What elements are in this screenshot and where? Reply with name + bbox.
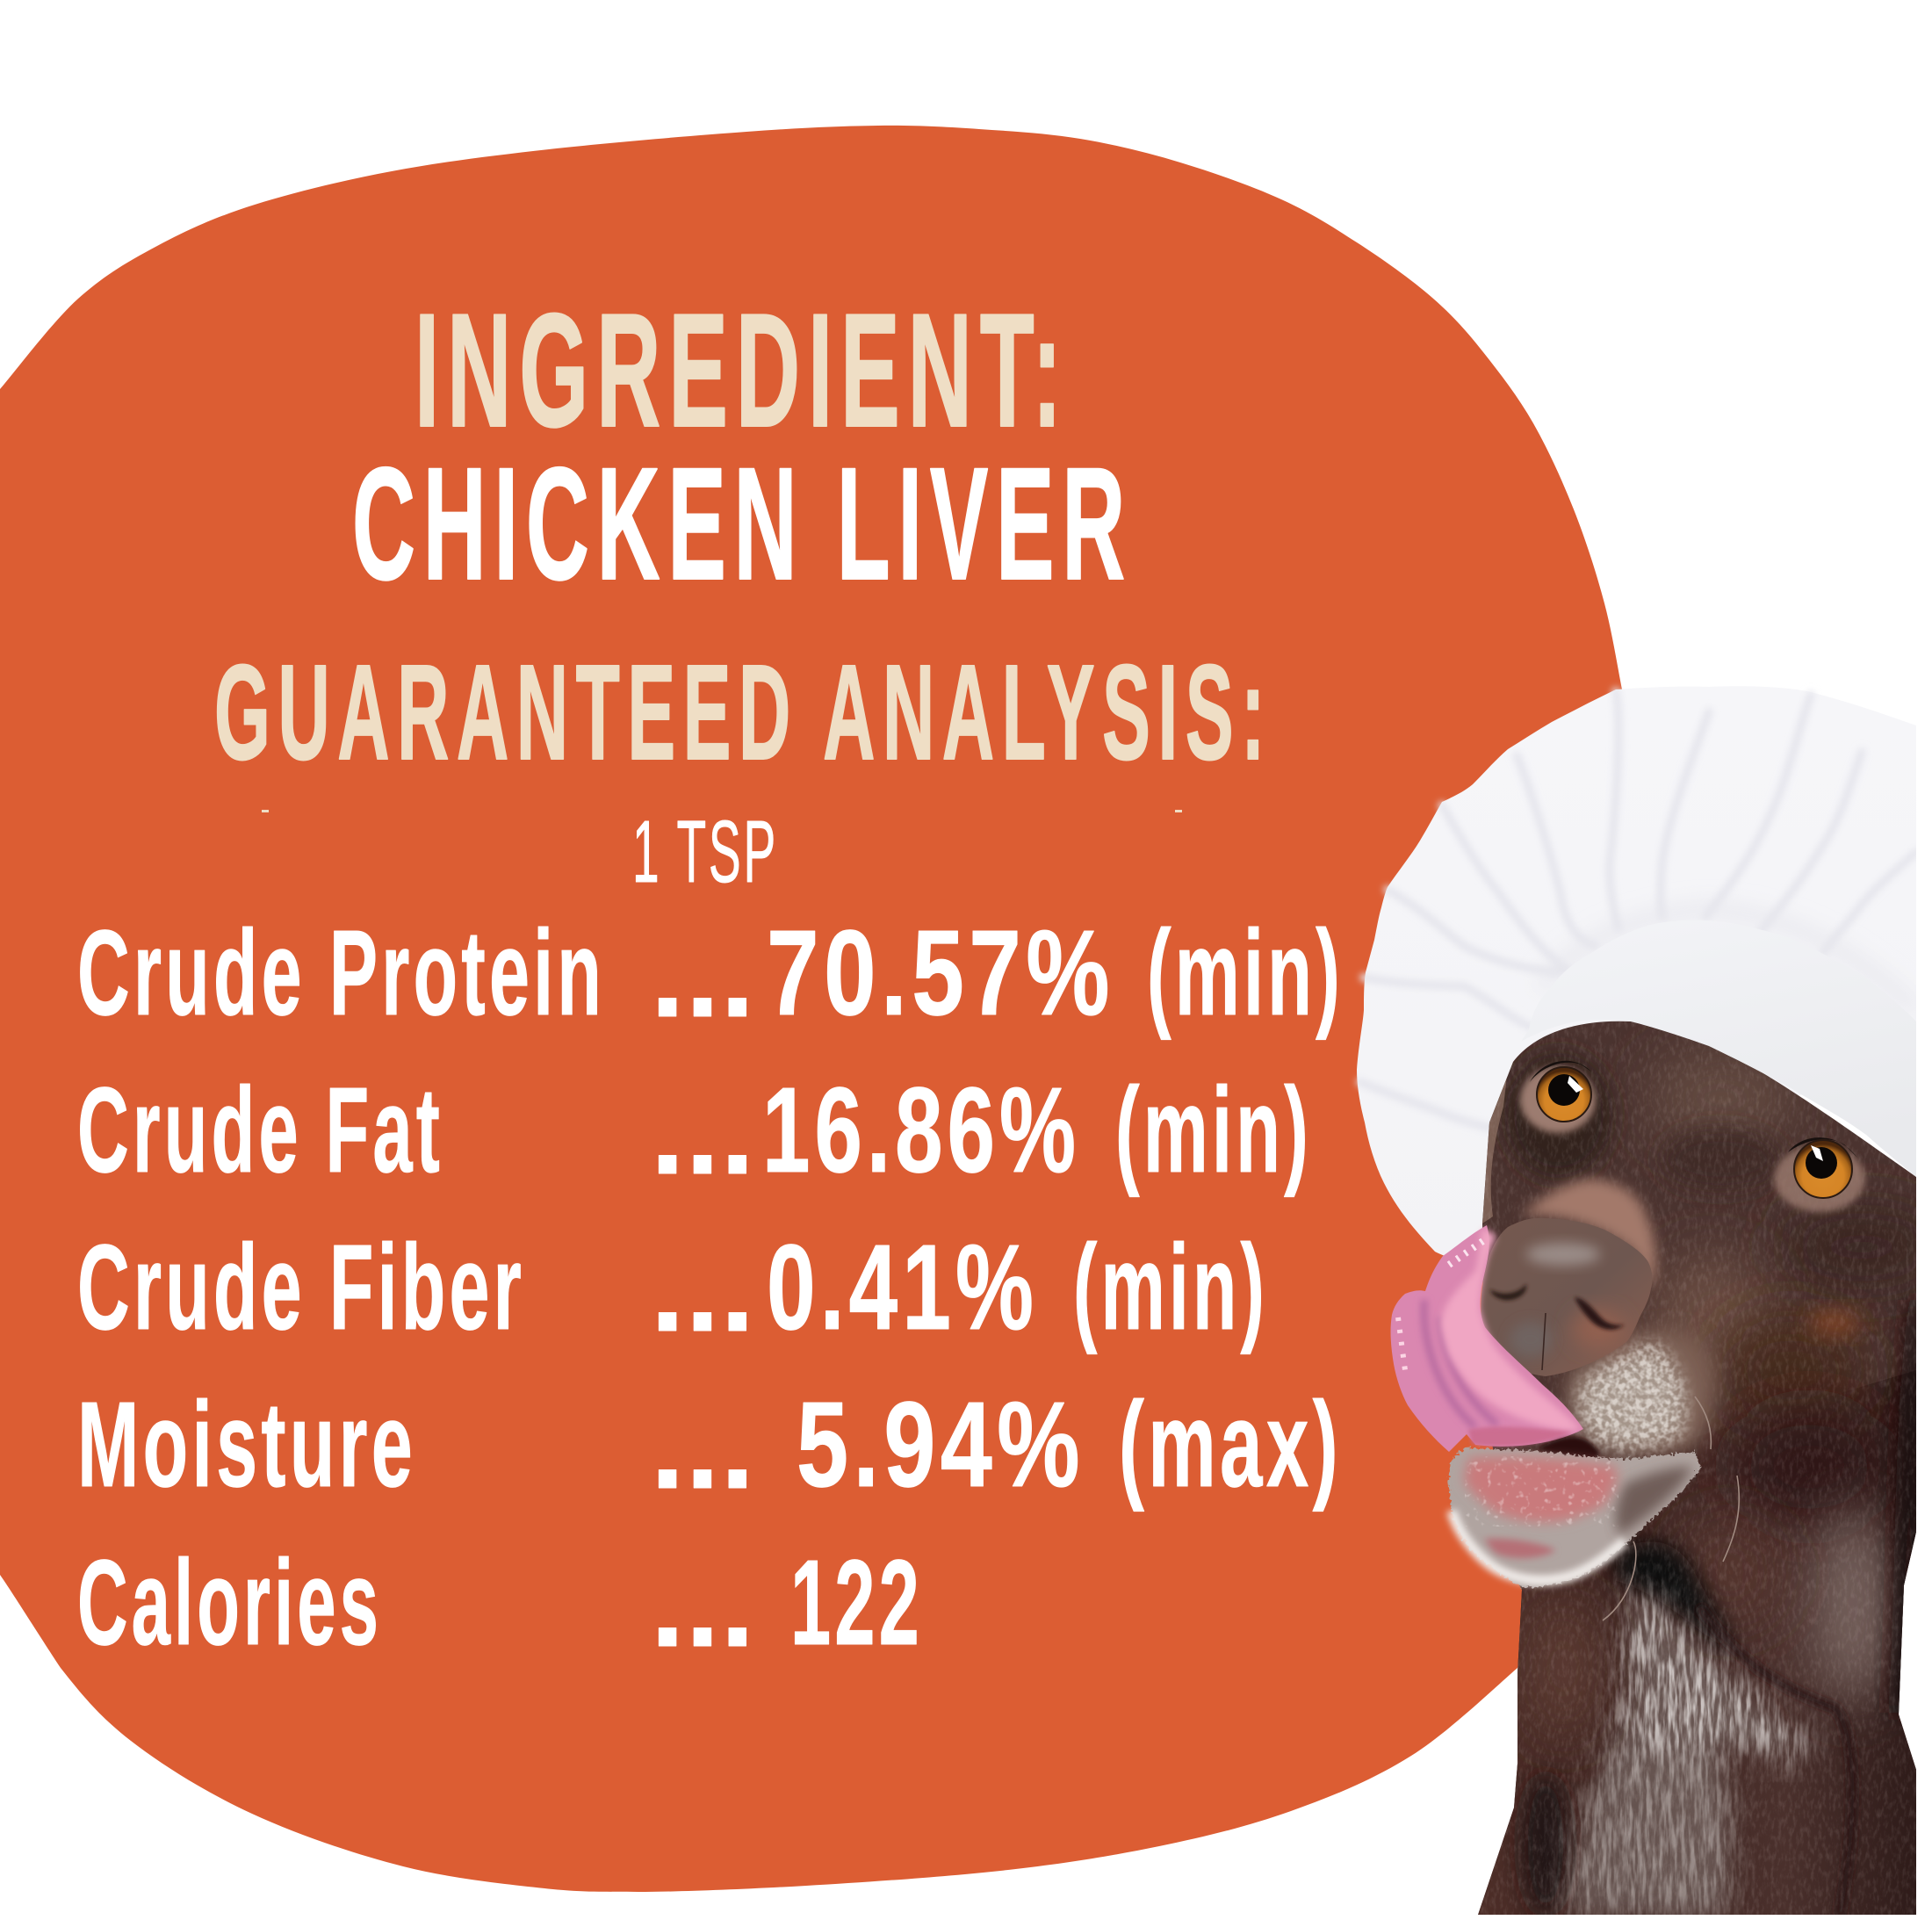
row: crude protein: Crude Protein	[77, 906, 605, 1041]
row: moisture: ...	[651, 1379, 754, 1514]
row: moisture: Moisture	[77, 1377, 416, 1512]
mouth gap	[1537, 1437, 1600, 1461]
lip light specks	[1465, 1456, 1618, 1526]
row: crude fat: 16.86%	[762, 1063, 1080, 1198]
tongue pale band	[1440, 1230, 1581, 1431]
left face edge highlight	[1482, 1076, 1507, 1223]
row: crude fiber: 0.41%	[767, 1220, 1038, 1355]
heading: ingredient: INGREDIENT:	[415, 279, 1070, 460]
row: crude protein: (min)	[1147, 906, 1344, 1041]
small marks beside serving size	[262, 810, 1182, 812]
row: crude fiber: Crude Fiber	[77, 1220, 525, 1355]
nostril right	[1575, 1297, 1625, 1330]
chef hat band	[1563, 929, 1916, 1177]
tongue folds	[1424, 1300, 1497, 1427]
throat dark shadow	[1616, 1541, 1734, 1660]
forehead light	[1647, 1050, 1796, 1146]
row: crude fat: (min)	[1115, 1063, 1312, 1198]
lower lip and jaw	[1449, 1447, 1701, 1587]
row: moisture: (max)	[1119, 1377, 1342, 1512]
row: calories: ...	[651, 1537, 754, 1672]
lower lip pink	[1484, 1539, 1556, 1558]
tongue highlights	[1449, 1240, 1484, 1265]
brow darks	[1504, 1052, 1613, 1179]
row: calories: 122	[790, 1535, 923, 1671]
nose bridge	[1521, 1179, 1656, 1289]
nostril left	[1490, 1284, 1526, 1300]
neck tone	[1478, 1370, 1916, 1915]
row: moisture: 5.94%	[797, 1377, 1085, 1512]
jaw dark side fur	[1616, 1467, 1693, 1535]
chest patch soft base	[1568, 1590, 1800, 1915]
jaw white rim	[1452, 1511, 1625, 1580]
photo: dog in chef hat	[1357, 686, 1932, 1915]
row: crude protein: ...	[651, 907, 754, 1043]
left eye	[1520, 1061, 1596, 1133]
row: crude fiber	[77, 1220, 1268, 1357]
whiskers	[1603, 1397, 1739, 1620]
row: moisture	[77, 1377, 1342, 1514]
row: calories	[77, 1535, 923, 1672]
heading: chicken liver: CHICKEN LIVER	[352, 434, 1133, 613]
row: crude fat: ...	[651, 1065, 754, 1200]
chest lower grey hairs	[1554, 1757, 1737, 1915]
nutrient table	[77, 906, 1344, 1672]
serving size label: 1 TSP	[632, 803, 778, 901]
cheek and jowl shading	[1651, 1256, 1774, 1379]
lower neck fold	[1699, 1607, 1852, 1915]
row: crude fat	[77, 1063, 1312, 1200]
panel: orange blob background	[0, 126, 1669, 1892]
right eye	[1774, 1137, 1865, 1212]
chef hat puff	[1357, 686, 1916, 1265]
row: crude fiber: (min)	[1073, 1220, 1268, 1355]
row: crude protein: 70.57%	[767, 906, 1114, 1041]
soft shadow above the band	[1541, 910, 1916, 1010]
tongue	[1391, 1225, 1583, 1452]
muzzle grey fur	[1568, 1330, 1717, 1454]
nose	[1481, 1218, 1653, 1376]
chest upper white hairs	[1598, 1581, 1813, 1764]
fur noise overlay	[1475, 1019, 1923, 1915]
row: crude fiber: ...	[651, 1222, 754, 1357]
hat folds	[1360, 691, 1916, 1130]
lip pink	[1464, 1456, 1617, 1522]
row: calories: Calories	[77, 1535, 382, 1671]
dog head and neck	[1475, 1019, 1932, 1915]
row: crude protein	[77, 906, 1344, 1043]
row: crude fat: Crude Fat	[77, 1063, 443, 1198]
